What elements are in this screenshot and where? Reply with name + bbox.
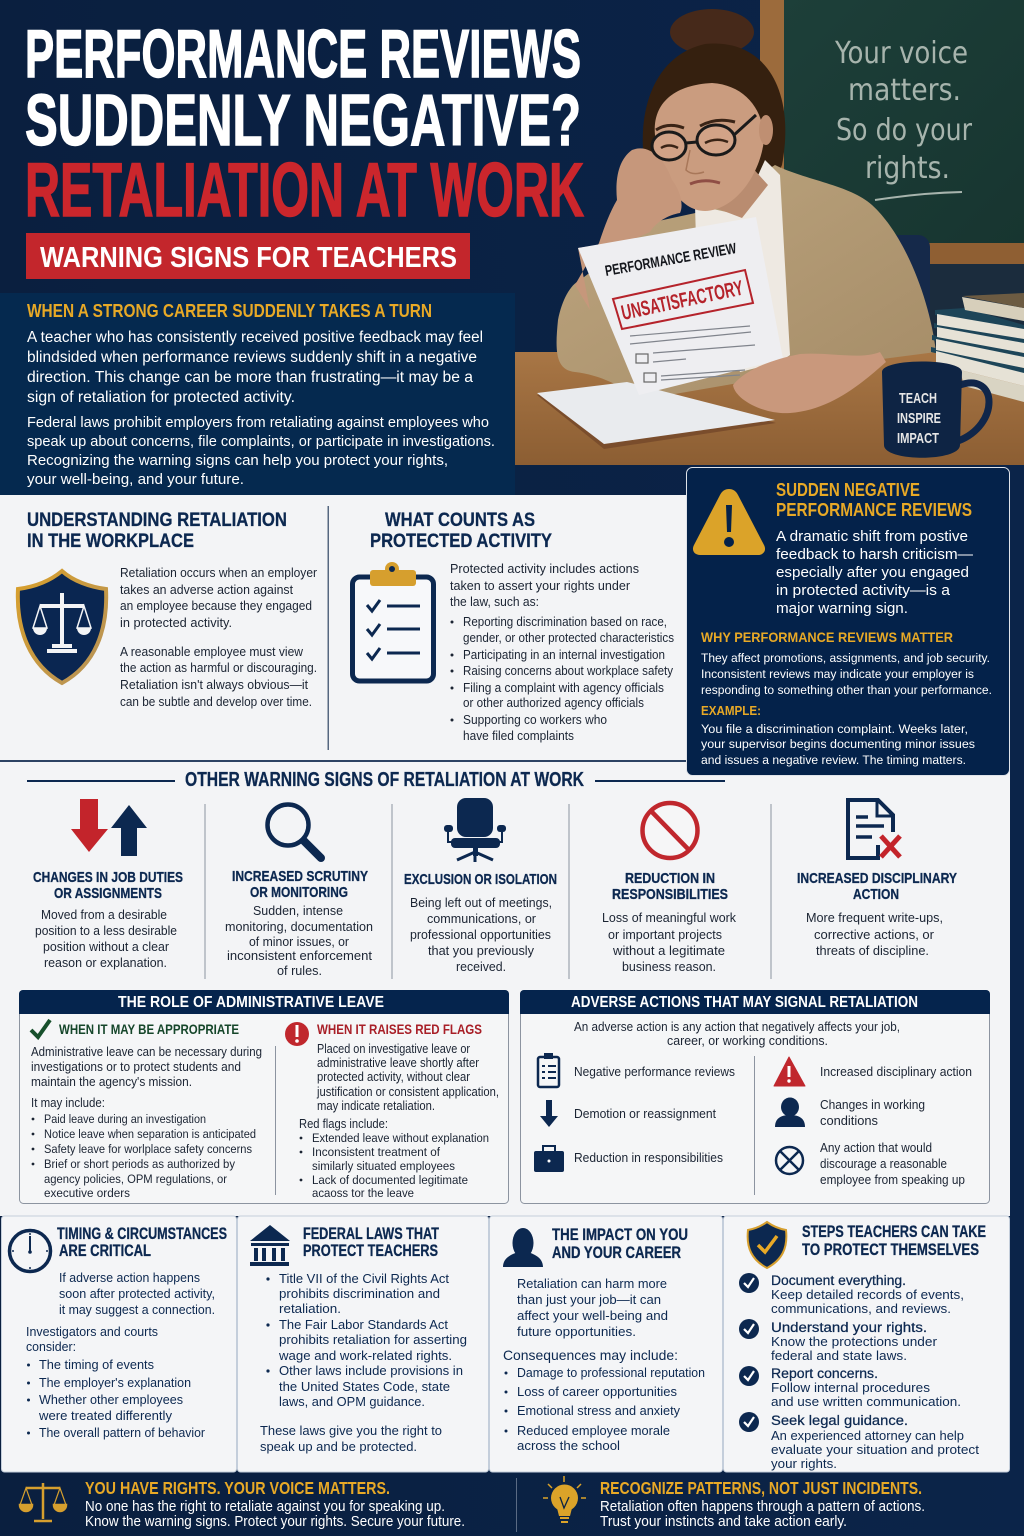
panel: sudden negative performance reviews: SUDDEN NEGATIVE	[776, 480, 920, 500]
icon: shield with scales	[18, 571, 106, 683]
panel: impact on you: THE IMPACT ON YOU	[552, 1226, 688, 1244]
step: understand your rights	[739, 1319, 938, 1363]
panel: role of administrative leave	[19, 990, 509, 1204]
step: understand your rights: Know the protections under	[771, 1334, 938, 1349]
text: when appropriate: Paid leave during an investigation	[44, 1112, 206, 1126]
panel: federal laws: FEDERAL LAWS THAT	[303, 1225, 439, 1243]
text: impact list: Loss of career opportunities	[517, 1384, 677, 1399]
panel: intro career turn: speak up about concerns, file complaints, or participate in investigations.	[27, 433, 495, 450]
subtitle banner	[26, 233, 470, 279]
warning sign: reduced responsibilities: RESPONSIBILITIES	[612, 886, 728, 903]
warning sign: disciplinary action: corrective actions, or	[814, 927, 935, 942]
text: protected activity list: Participating in an internal investigation	[463, 647, 665, 662]
text: when appropriate: Administrative leave can be necessary during	[31, 1045, 262, 1059]
text: protected activity list: the law, such as:	[450, 594, 539, 609]
text: retaliation definition: an employee because they engaged	[120, 598, 312, 613]
text: retaliation definition: takes an adverse action against	[120, 582, 293, 597]
icon: clipboard checklist	[352, 562, 434, 681]
step: document everything	[739, 1273, 964, 1316]
text: red flags: Placed on investigative leave or	[317, 1042, 470, 1056]
icon: briefcase	[534, 1146, 564, 1172]
step: seek legal guidance: evaluate your situation and protect	[771, 1442, 979, 1457]
panel: role of administrative leave: WHEN IT RAISES RED FLAGS	[317, 1021, 482, 1037]
panel: steps teachers can take	[724, 1216, 1010, 1472]
warning sign: exclusion: professional opportunities	[410, 927, 551, 942]
icon: green check	[31, 1020, 50, 1037]
text: protected activity list: gender, or other protected characteristics	[463, 630, 674, 645]
panel: sudden negative performance reviews: feedback to harsh criticism—	[776, 547, 974, 563]
text: when appropriate: Safety leave for worlplace safety concerns	[44, 1142, 252, 1156]
panel: timing and circumstances: ARE CRITICAL	[59, 1242, 151, 1260]
text: retaliation definition: Retaliation isn't always obvious—it	[120, 677, 308, 692]
text: protected activity list: or other authorized agency officials	[463, 695, 644, 710]
text: timing list: If adverse action happens	[59, 1270, 200, 1285]
panel: adverse actions	[520, 990, 990, 1204]
text: timing list: consider:	[26, 1339, 76, 1354]
panel: intro career turn: your well-being, and your future.	[27, 471, 244, 488]
step: understand your rights: Understand your rights.	[771, 1320, 927, 1335]
panel: adverse actions: Negative performance reviews	[574, 1065, 735, 1079]
text: impact list: Retaliation can harm more	[517, 1276, 667, 1291]
icon: light bulb	[543, 1476, 586, 1522]
warning sign: job duties: reason or explanation.	[44, 955, 167, 970]
icon: down and up arrows	[71, 799, 147, 856]
text: when appropriate: It may include:	[31, 1096, 105, 1110]
icon: clipboard list	[538, 1053, 559, 1087]
panel: sudden negative performance reviews: especially after you engaged	[776, 565, 969, 581]
text: retaliation definition: the action as harmful or discouraging.	[120, 660, 317, 675]
step: seek legal guidance: An experienced attorney can help	[771, 1428, 964, 1443]
panel: understanding retaliation: UNDERSTANDING RETALIATION	[27, 509, 287, 531]
photo: teacher reviewing a negative performance review	[515, 0, 1024, 465]
warning sign: scrutiny: monitoring, documentation	[225, 919, 373, 934]
step: understand your rights: federal and state laws.	[771, 1348, 907, 1363]
text: protected activity list: Filing a complaint with agency officials	[463, 680, 664, 695]
panel: adverse actions: An adverse action is any action that negatively affects your job,	[574, 1020, 900, 1034]
panel: sudden negative performance reviews: major warning sign.	[776, 601, 908, 617]
text: red flags: acaoss tor the leave	[312, 1186, 414, 1200]
footer: you have rights: YOU HAVE RIGHTS. YOUR VOICE MATTERS.	[85, 1478, 390, 1498]
icon: warning triangle	[693, 489, 765, 555]
step: seek legal guidance: your rights.	[771, 1456, 837, 1471]
coffee mug: TEACH	[899, 390, 937, 407]
panel: role of administrative leave: WHEN IT MAY BE APPROPRIATE	[59, 1021, 239, 1037]
text: when appropriate	[31, 1045, 262, 1200]
text: timing list: soon after protected activity,	[59, 1286, 215, 1301]
warning sign: exclusion: Being left out of meetings,	[410, 895, 552, 910]
text: federal laws list: The Fair Labor Standards Act	[279, 1317, 448, 1332]
footer: you have rights: Know the warning signs. Protect your rights. Secure your future.	[85, 1514, 465, 1530]
text: protected activity list: Protected activity includes actions	[450, 561, 639, 576]
warning sign: reduced responsibilities: business reason.	[622, 959, 716, 974]
text: impact list: across the school	[517, 1438, 620, 1453]
icon: prohibition sign	[642, 803, 698, 858]
text: when appropriate: executive orders	[44, 1186, 130, 1200]
warning sign: disciplinary action: ACTION	[853, 886, 899, 903]
warning sign: scrutiny: of rules.	[277, 963, 322, 978]
footer: recognize patterns	[543, 1476, 925, 1530]
chalkboard message: Your voice	[834, 36, 968, 71]
text: federal laws list: laws, and OPM guidance.	[279, 1394, 425, 1409]
warning sign: job duties: Moved from a desirable	[41, 907, 167, 922]
text: impact list: future opportunities.	[517, 1324, 636, 1339]
warning sign: exclusion: that you previously	[428, 943, 534, 958]
text: red flags: protected activity, without clear	[317, 1070, 470, 1084]
panel: sudden negative performance reviews: responding to something other than your performance.	[701, 683, 992, 697]
text: timing list: The overall pattern of behavior	[39, 1425, 206, 1440]
text: impact list	[503, 1276, 705, 1453]
performance review paper: UNSATISFACTORY	[619, 277, 745, 325]
text: impact list: affect your well-being and	[517, 1308, 668, 1323]
panel: intro career turn: WHEN A STRONG CAREER SUDDENLY TAKES A TURN	[27, 300, 432, 321]
text: timing list	[26, 1270, 215, 1440]
panel: sudden negative performance reviews: EXAMPLE:	[701, 703, 761, 718]
heading: other warning signs: OTHER WARNING SIGNS OF RETALIATION AT WORK	[185, 768, 584, 791]
warning sign: job duties: position without a clear	[43, 939, 170, 954]
coffee mug	[882, 362, 989, 458]
panel: adverse actions: conditions	[820, 1114, 878, 1128]
performance review paper	[578, 217, 783, 395]
text: impact list: Emotional stress and anxiety	[517, 1403, 680, 1418]
footer: recognize patterns: Trust your instincts and take action early.	[600, 1514, 847, 1530]
warning sign: reduced responsibilities: or important projects	[608, 927, 722, 942]
warning sign: job duties: position to a less desirable	[35, 923, 177, 938]
subtitle banner: WARNING SIGNS FOR TEACHERS	[40, 242, 457, 274]
footer: recognize patterns: Retaliation often happens through a pattern of actions.	[600, 1499, 925, 1515]
text: red flags: may indicate retaliation.	[317, 1099, 435, 1113]
warning sign: reduced responsibilities: REDUCTION IN	[625, 870, 715, 887]
text: protected activity list: Raising concerns about workplace safety	[463, 663, 673, 678]
panel: federal laws: PROTECT TEACHERS	[303, 1242, 438, 1260]
text: federal laws list: Title VII of the Civil Rights Act	[279, 1271, 449, 1286]
icon: clock	[10, 1230, 50, 1272]
panel: intro career turn: sign of retaliation for protected activity.	[27, 389, 295, 406]
panel: federal laws	[238, 1216, 488, 1472]
footer: recognize patterns: RECOGNIZE PATTERNS, NOT JUST INCIDENTS.	[600, 1478, 922, 1498]
teacher figure	[557, 9, 936, 400]
panel: role of administrative leave: THE ROLE OF ADMINISTRATIVE LEAVE	[118, 994, 384, 1011]
text: federal laws list: speak up and be protected.	[260, 1439, 417, 1454]
icon: gold scales	[20, 1483, 66, 1521]
text: retaliation definition: in protected activity.	[120, 615, 232, 630]
panel: sudden negative performance reviews: your supervisor begins documenting minor issues	[701, 737, 975, 751]
step: seek legal guidance: Seek legal guidance.	[771, 1413, 908, 1428]
stack of books	[931, 293, 1024, 402]
warning sign: exclusion	[404, 798, 557, 974]
text: when appropriate: investigations or to protect students and	[31, 1060, 241, 1074]
text: timing list: The timing of events	[39, 1357, 154, 1372]
text: protected activity list: Reporting discrimination based on race,	[463, 614, 667, 629]
panel: sudden negative performance reviews: You file a discrimination complaint. Weeks later,	[701, 722, 968, 736]
step: document everything: Keep detailed records of events,	[771, 1287, 964, 1302]
icon: down arrow	[540, 1100, 558, 1127]
text: red flags: administrative leave shortly after	[317, 1056, 479, 1070]
text: federal laws list: prohibits retaliation for asserting	[279, 1332, 467, 1347]
panel: intro career turn: A teacher who has consistently received positive feedback may feel	[27, 329, 483, 346]
panel: sudden negative performance reviews: and issues a negative review. The timing matters.	[701, 753, 966, 767]
panel: timing and circumstances: TIMING & CIRCUMSTANCES	[57, 1225, 227, 1243]
text: timing list: Whether other employees	[39, 1392, 183, 1407]
panel: sudden negative performance reviews: A dramatic shift from postive	[776, 529, 968, 545]
panel: sudden negative performance reviews: PERFORMANCE REVIEWS	[776, 500, 972, 520]
title: RETALIATION AT WORK	[25, 148, 584, 233]
step: document everything: communications, and reviews.	[771, 1301, 951, 1316]
text: when appropriate: Brief or short periods as authorized by	[44, 1157, 236, 1171]
icon: person silhouette	[503, 1228, 543, 1267]
panel: protected activity	[352, 509, 674, 743]
title	[25, 16, 584, 233]
panel: protected activity: WHAT COUNTS AS	[385, 509, 535, 531]
warning sign: exclusion: received.	[456, 959, 506, 974]
icon: crossed circle	[776, 1147, 803, 1174]
warning sign: disciplinary action: More frequent write-ups,	[806, 910, 943, 925]
panel: understanding retaliation	[18, 509, 318, 709]
text: red flags: Lack of documented legitimate	[312, 1173, 468, 1187]
text: red flags	[299, 1042, 499, 1200]
text: federal laws list: wage and work-related rights.	[278, 1348, 452, 1363]
text: federal laws list: the United States Code, state	[279, 1379, 450, 1394]
panel: intro career turn: Recognizing the warning signs can help you protect your rights,	[27, 452, 448, 469]
text: impact list: Damage to professional reputation	[517, 1365, 705, 1380]
warning sign: exclusion: communications, or	[427, 911, 537, 926]
warning sign: reduced responsibilities: Loss of meaningful work	[602, 910, 736, 925]
coffee mug: IMPACT	[897, 430, 939, 447]
text: retaliation definition: can be subtle and develop over time.	[120, 694, 312, 709]
panel: adverse actions: Any action that would	[820, 1141, 932, 1155]
text: impact list: than just your job—it can	[517, 1292, 661, 1307]
panel: sudden negative performance reviews: WHY PERFORMANCE REVIEWS MATTER	[701, 629, 953, 645]
text: red flags: Inconsistent treatment of	[312, 1145, 441, 1159]
text: timing list: Investigators and courts	[26, 1324, 158, 1339]
step: report concerns	[739, 1366, 961, 1409]
warning sign: exclusion: EXCLUSION OR ISOLATION	[404, 871, 557, 888]
icon: courthouse building	[250, 1225, 290, 1266]
text: timing list: The employer's explanation	[39, 1375, 191, 1390]
text: federal laws list	[260, 1271, 467, 1454]
text: red flags: justification or consistent application,	[316, 1085, 499, 1099]
warning sign: scrutiny: inconsistent enforcement	[227, 948, 372, 963]
panel: intro career turn: Federal laws prohibit employers from retaliating against employees who	[27, 414, 489, 431]
chalkboard message: matters.	[848, 73, 961, 108]
text: retaliation definition: Retaliation occurs when an employer	[120, 565, 318, 580]
light content background	[0, 495, 1010, 1216]
text: impact list: Consequences may include:	[503, 1347, 678, 1363]
warning sign: disciplinary action	[797, 800, 957, 958]
warning sign: disciplinary action: threats of discipline.	[816, 943, 929, 958]
warning sign: scrutiny	[225, 804, 373, 978]
warning sign: scrutiny: OR MONITORING	[250, 884, 348, 901]
warning sign: scrutiny: of minor issues, or	[249, 934, 350, 949]
panel: adverse actions: Reduction in responsibilities	[574, 1151, 723, 1165]
chalkboard message: So do your	[836, 113, 973, 148]
text: protected activity list: taken to assert your rights under	[450, 578, 631, 593]
icon: magnifying glass	[268, 804, 321, 858]
panel: impact on you	[490, 1216, 722, 1472]
panel: adverse actions: discourage a reasonable	[820, 1157, 947, 1171]
panel: sudden negative performance reviews: Inconsistent reviews may indicate your employer is	[701, 667, 974, 681]
text: federal laws list: Other laws include provisions in	[279, 1363, 463, 1378]
panel: protected activity: PROTECTED ACTIVITY	[370, 530, 552, 552]
step: report concerns: Follow internal procedures	[771, 1380, 931, 1395]
panel: steps teachers can take: TO PROTECT THEMSELVES	[802, 1241, 979, 1259]
icon: person	[775, 1098, 805, 1127]
warning sign: job duties: OR ASSIGNMENTS	[54, 885, 162, 902]
panel: adverse actions: career, or working conditions.	[667, 1034, 828, 1048]
text: retaliation definition	[120, 565, 318, 709]
panel: adverse actions: Demotion or reassignment	[574, 1107, 716, 1121]
step: document everything: Document everything.	[771, 1273, 906, 1288]
step: report concerns: and use written communication.	[771, 1394, 961, 1409]
panel: intro career turn: blindsided when performance reviews suddenly shift in a negative	[27, 349, 477, 366]
panel: sudden negative performance reviews: in protected activity—is a	[776, 583, 951, 599]
text: when appropriate: agency policies, OPM regulations, or	[44, 1172, 227, 1186]
panel: adverse actions: ADVERSE ACTIONS THAT MAY SIGNAL RETALIATION	[571, 994, 918, 1011]
panel: sudden negative performance reviews	[686, 468, 1010, 776]
warning sign: job duties	[33, 799, 183, 970]
panel: sudden negative performance reviews: They affect promotions, assignments, and job security.	[701, 651, 990, 665]
step: seek legal guidance	[739, 1412, 979, 1471]
text: protected activity list	[450, 561, 674, 743]
text: red flags: Red flags include:	[299, 1117, 388, 1131]
icon: red warning triangle	[774, 1057, 805, 1086]
text: retaliation definition: A reasonable employee must view	[120, 644, 304, 659]
panel: understanding retaliation: IN THE WORKPLACE	[27, 530, 194, 552]
text: timing list: were treated differently	[38, 1408, 172, 1423]
panel: impact on you: AND YOUR CAREER	[552, 1244, 681, 1262]
notebook	[537, 382, 776, 449]
footer: you have rights: No one has the right to retaliate against you for speaking up.	[85, 1499, 445, 1515]
chalkboard message: rights.	[865, 151, 950, 186]
panel: timing and circumstances	[2, 1216, 236, 1472]
warning sign: job duties: CHANGES IN JOB DUTIES	[33, 869, 183, 886]
text: federal laws list: These laws give you the right to	[260, 1423, 442, 1438]
warning sign: disciplinary action: INCREASED DISCIPLINARY	[797, 870, 957, 887]
step: report concerns: Report concerns.	[771, 1366, 878, 1381]
footer: you have rights	[20, 1478, 465, 1530]
icon: office chair	[444, 798, 506, 862]
text: when appropriate: Notice leave when separation is anticipated	[44, 1127, 256, 1141]
text: red flags: Extended leave without explanation	[312, 1131, 489, 1145]
title: PERFORMANCE REVIEWS	[25, 16, 581, 92]
coffee mug: INSPIRE	[897, 410, 941, 427]
text: protected activity list: Supporting co workers who	[463, 712, 607, 727]
panel: adverse actions: Changes in working	[820, 1098, 925, 1112]
title: SUDDENLY NEGATIVE?	[25, 81, 581, 161]
icon: shield check	[748, 1222, 786, 1268]
panel: intro career turn: direction. This change can be more than frustrating—it may be a	[27, 369, 473, 386]
text: red flags: similarly situated employees	[312, 1159, 455, 1173]
warning sign: scrutiny: Sudden, intense	[253, 903, 343, 918]
text: protected activity list: have filed complaints	[463, 728, 574, 743]
text: federal laws list: prohibits discrimination and	[279, 1286, 440, 1301]
text: timing list: it may suggest a connection.	[59, 1302, 215, 1317]
text: federal laws list: retaliation.	[279, 1301, 341, 1316]
warning sign: scrutiny: INCREASED SCRUTINY	[232, 868, 368, 885]
icon: red exclamation	[285, 1022, 309, 1046]
warning sign: reduced responsibilities: without a legitimate	[612, 943, 725, 958]
panel: adverse actions: Increased disciplinary action	[820, 1065, 972, 1079]
chalkboard message	[834, 36, 973, 200]
panel: adverse actions: employee from speaking up	[820, 1173, 965, 1187]
panel: intro career turn	[0, 293, 515, 495]
performance review paper: PERFORMANCE REVIEW	[604, 240, 738, 280]
warning sign: reduced responsibilities	[602, 803, 736, 974]
text: impact list: Reduced employee morale	[517, 1423, 670, 1438]
text: when appropriate: maintain the agency's mission.	[31, 1075, 192, 1089]
icon: document with red x	[848, 800, 900, 858]
